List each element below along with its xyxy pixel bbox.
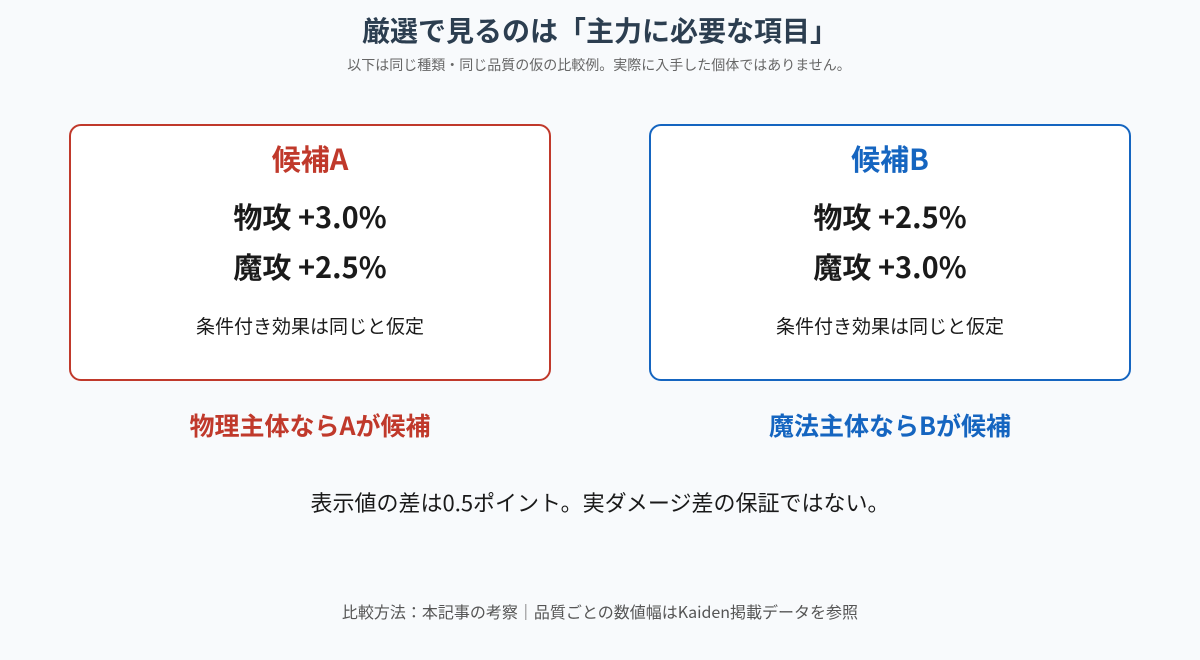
candidate B heading: 候補B — [851, 137, 929, 179]
candidate A physical attack: 物攻 +3.0% — [233, 195, 387, 237]
panel: candidate A — [69, 124, 551, 381]
summary note: 表示値の差は0.5ポイント。実ダメージ差の保証ではない。 — [310, 486, 890, 518]
footer source: 比較方法：本記事の考察｜品質ごとの数値幅はKaiden掲載データを参照 — [342, 599, 858, 623]
verdict A: 物理主体ならAが候補 — [189, 407, 431, 443]
candidate B magic attack: 魔攻 +3.0% — [813, 245, 967, 287]
verdict B: 魔法主体ならBが候補 — [769, 407, 1011, 443]
candidate A note: 条件付き効果は同じと仮定 — [196, 312, 424, 339]
subtitle: 以下は同じ種類・同じ品質の仮の比較例。実際に入手した個体ではありません。 — [347, 55, 851, 75]
candidate A magic attack: 魔攻 +2.5% — [233, 245, 387, 287]
candidate B physical attack: 物攻 +2.5% — [813, 195, 967, 237]
panel: candidate B — [649, 124, 1131, 381]
candidate B note: 条件付き効果は同じと仮定 — [776, 312, 1004, 339]
candidate A heading: 候補A — [272, 137, 348, 179]
title: 厳選で見るのは「主力に必要な項目」 — [362, 10, 838, 50]
